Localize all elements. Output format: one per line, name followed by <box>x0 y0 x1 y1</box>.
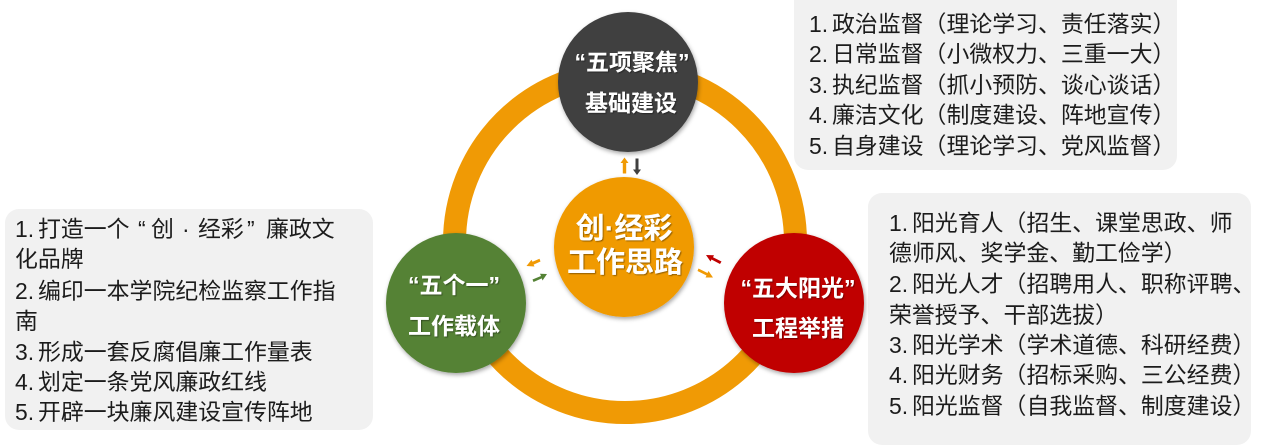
panel: top list <box>794 0 1177 170</box>
panel: right list: 阳光监督（自我监督、制度建设） <box>912 393 1255 419</box>
panel: right list: 阳光人才（招聘用人、职称评聘、 <box>912 271 1255 297</box>
arrow: centre to left <box>526 259 540 266</box>
panel: left list: “ <box>138 216 146 242</box>
panel: right list: 4. <box>889 362 908 388</box>
arrow: left to centre <box>532 274 547 282</box>
circle: top, foundation building: “五项聚焦” <box>574 49 690 75</box>
circle: left, work carriers: 工作载体 <box>408 313 500 339</box>
panel: left list: 创 <box>151 216 174 242</box>
circle: top, foundation building: 基础建设 <box>585 90 677 116</box>
circle: right, engineering measures <box>724 233 864 373</box>
circle: right, engineering measures: 工程举措 <box>752 315 844 341</box>
panel: top list: 4. <box>809 102 828 128</box>
panel: left list: · <box>182 216 190 242</box>
panel: right list: 荣誉授予、干部选拔） <box>889 302 1118 328</box>
panel: right list: 阳光育人（招生、课堂思政、师 <box>912 210 1232 236</box>
circle: centre, work approach <box>554 177 694 317</box>
circle: left, work carriers <box>386 233 526 373</box>
panel: left list: 4. <box>15 369 34 395</box>
arrow: top to centre <box>633 158 641 175</box>
panel: left list: 开辟一块廉风建设宣传阵地 <box>38 399 313 425</box>
panel: left list: 南 <box>15 308 38 334</box>
panel: right list <box>868 193 1255 445</box>
arrow: centre to top <box>620 158 628 174</box>
panel: right list: 5. <box>889 393 908 419</box>
panel: left list <box>5 209 373 430</box>
panel: left list: 3. <box>15 339 34 365</box>
panel: left list: 划定一条党风廉政红线 <box>38 369 267 395</box>
panel: right list: 阳光财务（招标采购、三公经费） <box>912 362 1255 388</box>
panel: top list: 3. <box>809 72 828 98</box>
panel: top list: 日常监督（小微权力、三重一大） <box>832 41 1175 67</box>
circle: centre, work approach: 创·经彩 <box>576 212 672 245</box>
panel: top list: 廉洁文化（制度建设、阵地宣传） <box>832 102 1175 128</box>
panel: top list: 2. <box>809 41 828 67</box>
arrow: right to centre <box>706 255 722 264</box>
panel: left list: 1. <box>15 216 34 242</box>
ring connecting the three circles <box>454 72 796 412</box>
panel: right list: 2. <box>889 271 908 297</box>
arrow: centre to right <box>698 268 713 278</box>
circle: centre, work approach: 工作思路 <box>567 246 683 279</box>
panel: right list: 阳光学术（学术道德、科研经费） <box>912 332 1255 358</box>
panel: left list: 化品牌 <box>15 246 84 272</box>
circle: top, foundation building <box>558 12 698 152</box>
panel: top list: 政治监督（理论学习、责任落实） <box>832 11 1175 37</box>
panel: top list: 自身建设（理论学习、党风监督） <box>832 133 1175 159</box>
panel: left list: ” <box>247 216 255 242</box>
panel: left list: 5. <box>15 399 34 425</box>
panel: left list: 打造一个 <box>38 216 130 242</box>
panel: top list: 执纪监督（抓小预防、谈心谈话） <box>832 72 1175 98</box>
panel: left list: 2. <box>15 278 34 304</box>
panel: right list: 3. <box>889 332 908 358</box>
panel: left list: 编印一本学院纪检监察工作指 <box>38 278 336 304</box>
panel: left list: 形成一套反腐倡廉工作量表 <box>38 339 313 365</box>
panel: right list: 1. <box>889 210 908 236</box>
circle: left, work carriers: “五个一” <box>408 272 500 298</box>
panel: top list: 1. <box>809 11 828 37</box>
panel: left list: 经彩 <box>198 216 244 242</box>
panel: top list: 5. <box>809 133 828 159</box>
panel: right list: 德师风、奖学金、勤工俭学） <box>889 240 1187 266</box>
panel: left list: 廉政文 <box>266 216 335 242</box>
circle: right, engineering measures: “五大阳光” <box>740 275 856 301</box>
